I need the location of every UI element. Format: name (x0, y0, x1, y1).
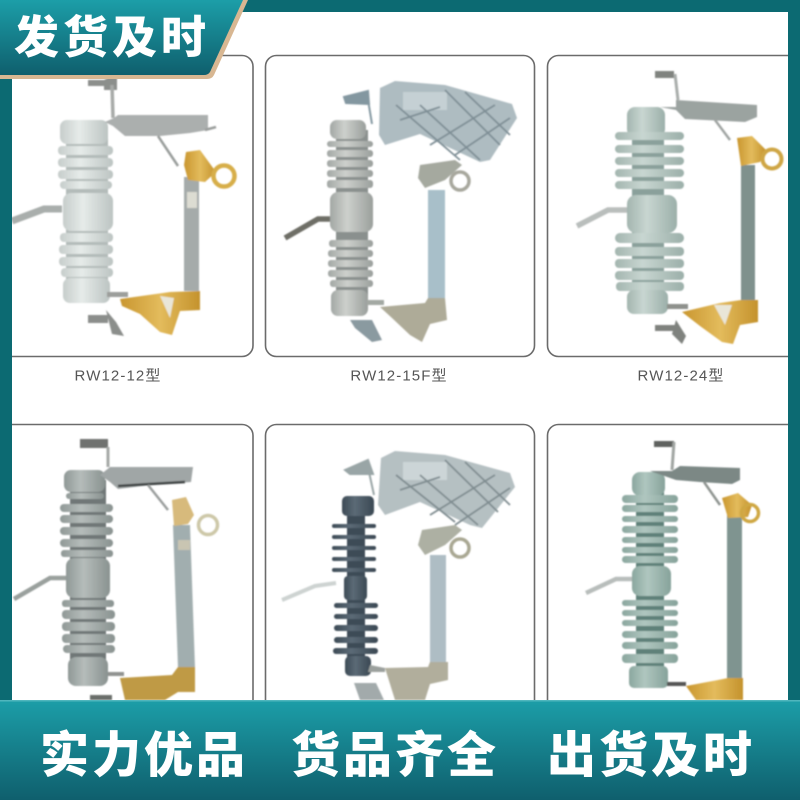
frame: top bar (0, 0, 800, 12)
heading: 发货及时: 发货及时 (14, 12, 210, 63)
top contact and ring (184, 150, 234, 186)
top bolt (345, 460, 374, 495)
fuse tube (428, 190, 445, 301)
arc chamber (379, 81, 517, 162)
bottom contact (88, 291, 200, 336)
insulator body (332, 496, 378, 676)
lead wire (577, 210, 627, 226)
lead wire (282, 583, 336, 600)
insulator body (615, 107, 684, 314)
lead wire (586, 579, 633, 593)
insulator body (327, 120, 373, 316)
label: RW12-12: RW12-12型 (75, 368, 161, 384)
label: RW12-24: RW12-24型 (638, 368, 724, 384)
bottom contact (667, 678, 743, 700)
top contact and ring (722, 493, 758, 522)
top contact and ring (418, 525, 469, 557)
top contact and ring (737, 136, 782, 168)
top bolt (344, 91, 372, 124)
top arm and bolt (650, 441, 740, 505)
lead wire (14, 578, 66, 599)
bottom contact (655, 300, 758, 344)
frame: right bar (788, 0, 800, 800)
fuse tube (727, 515, 742, 680)
bottom contact (90, 667, 195, 700)
card: row two left (0, 424, 253, 726)
card: RW12-12 (0, 56, 253, 356)
arc chamber (378, 451, 515, 528)
card: RW12-15F (266, 56, 534, 356)
bottom contact (354, 662, 448, 700)
slogan: 出货及时: 出货及时 (547, 729, 755, 783)
card: row two right (548, 424, 800, 726)
lead wire (285, 219, 330, 238)
top contact and ring (418, 160, 469, 190)
insulator body (622, 472, 678, 688)
fuse tube (173, 525, 195, 668)
bottom contact (350, 298, 447, 342)
slogan: 实力优品: 实力优品 (40, 728, 248, 783)
slogan: 货品齐全: 货品齐全 (291, 729, 499, 783)
frame: left bar (0, 0, 12, 800)
card: row two centre (266, 424, 534, 726)
card: RW12-24 (548, 56, 800, 356)
insulator body (58, 120, 113, 303)
fuse tube (430, 555, 446, 667)
label: RW12-15F: RW12-15F型 (350, 368, 448, 384)
top arm and bolt (80, 439, 193, 510)
lead wire (12, 209, 62, 221)
top arm and bolt (88, 78, 216, 166)
fuse tube (184, 177, 199, 291)
fuse tube (741, 165, 755, 300)
top contact and ring (172, 497, 218, 534)
bottom banner (0, 700, 800, 800)
top-left badge (0, 0, 248, 79)
insulator body (60, 470, 115, 686)
top arm and bolt (655, 71, 757, 140)
